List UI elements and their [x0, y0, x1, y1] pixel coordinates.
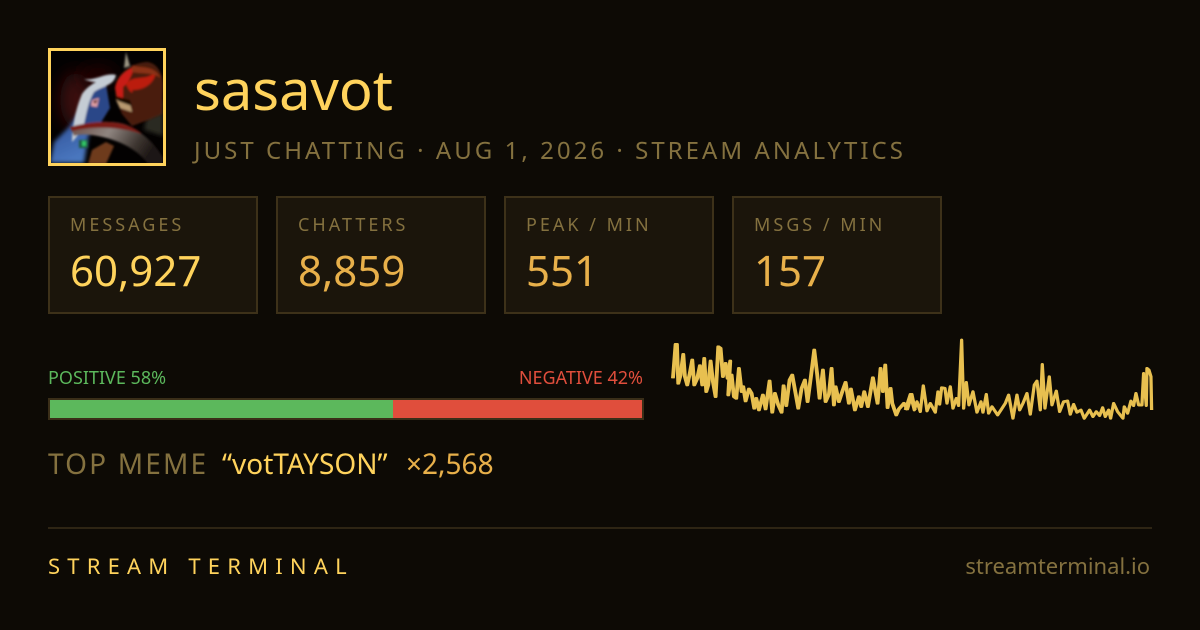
top meme row: TOP MEME: [48, 445, 208, 483]
stat card: messages per minute: 157: [754, 242, 826, 299]
stat card: peak per minute: 551: [526, 242, 598, 299]
stat card: messages: MESSAGES: [70, 213, 184, 237]
sentiment label: positive: POSITIVE 58%: [48, 366, 166, 390]
footer brand: STREAM TERMINAL: [48, 551, 354, 581]
sentiment label: negative: NEGATIVE 42%: [519, 366, 643, 390]
top meme row: ×2,568: [406, 445, 494, 483]
stat card: peak per minute: [504, 196, 714, 314]
stat card: chatters: [276, 196, 486, 314]
subtitle: JUST CHATTING · AUG 1, 2026 · STREAM ANALYTICS: [194, 134, 906, 167]
stat card: chatters: 8,859: [298, 242, 405, 299]
sentiment bar: [48, 398, 644, 420]
avatar: [48, 48, 166, 166]
stat card: chatters: CHATTERS: [298, 213, 408, 237]
footer url: streamterminal.io: [965, 551, 1150, 581]
stat card: messages per minute: MSGS / MIN: [754, 213, 885, 237]
stat card: messages: 60,927: [70, 242, 201, 299]
stat card: messages per minute: [732, 196, 942, 314]
sparkline chart: [671, 338, 1154, 420]
top meme row: [48, 445, 494, 483]
top meme row: “votTAYSON”: [222, 445, 388, 483]
stat card: messages: [48, 196, 258, 314]
title: streamer name: sasavot: [194, 51, 393, 127]
stat card: peak per minute: PEAK / MIN: [526, 213, 652, 237]
